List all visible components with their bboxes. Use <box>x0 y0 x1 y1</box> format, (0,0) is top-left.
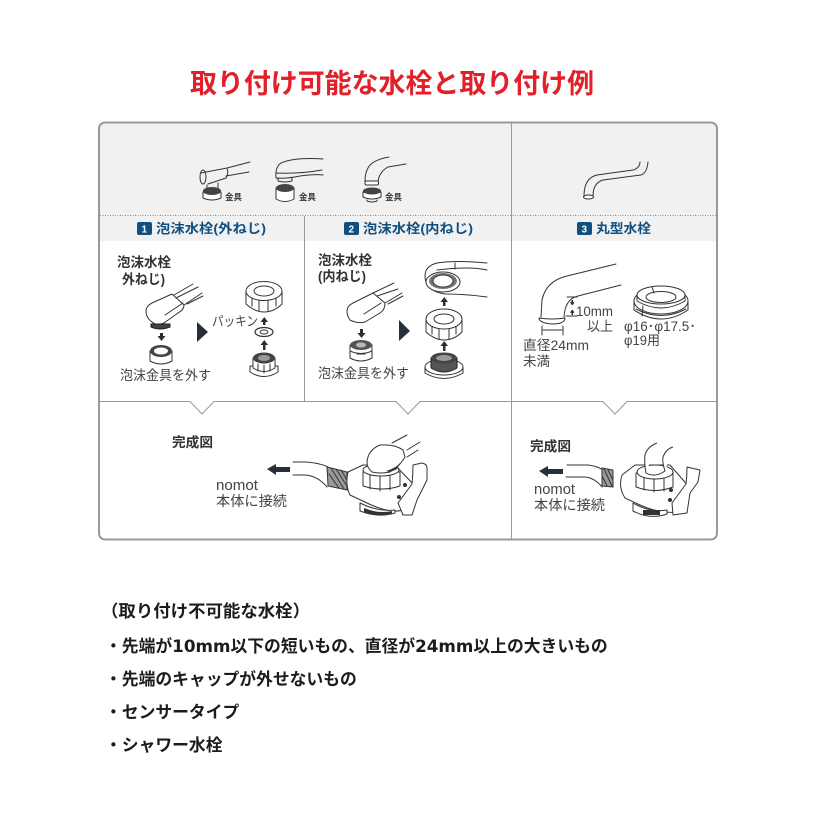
panel: step 1 external thread <box>117 254 282 383</box>
icon: faucet type 3: 金具 <box>385 192 402 202</box>
icon: arrow up <box>440 341 448 351</box>
icon: arrow up <box>260 317 268 325</box>
label: external thread: 外ねじ) <box>122 271 165 287</box>
arrow: next <box>197 322 208 342</box>
arrow: next <box>399 320 410 341</box>
label: under: 未満 <box>523 354 550 369</box>
label: connect to body: 本体に接続 <box>534 497 605 514</box>
arrow: to nomot <box>267 464 290 475</box>
label: external thread faucet: 泡沫水栓 <box>117 254 171 270</box>
icon: threaded adapter <box>425 352 463 378</box>
label: sizes line 2: φ19用 <box>624 333 660 348</box>
label: 10mm or more: 10mm <box>576 304 613 319</box>
icon: faucet type 2: 金具 <box>299 192 316 202</box>
caption: remove aerator: 泡沫金具を外す <box>318 366 409 381</box>
heading: not installable: （取り付け不可能な水栓） <box>101 601 310 621</box>
heading: type 3: 丸型水栓 <box>596 221 651 236</box>
panel: faucet types <box>99 122 717 540</box>
icon: faucet type 1 <box>200 162 250 202</box>
label: diameter: 直径24mm <box>523 338 589 353</box>
label: or more: 以上 <box>587 319 613 334</box>
list item: short or large: ・先端が10mm以下の短いもの、直径が24mm以上の大きいもの <box>105 636 608 656</box>
label: completed: 完成図 <box>530 438 571 454</box>
icon: arrow up <box>260 340 268 350</box>
panel: step 2 internal thread <box>318 252 487 381</box>
list item: sensor: ・センサータイプ <box>105 703 239 722</box>
label: completed: 完成図 <box>172 434 213 450</box>
heading: type 2: 2 <box>348 224 354 236</box>
icon: ring adapter <box>634 286 688 319</box>
label: sizes: φ16･φ17.5･ <box>624 319 696 334</box>
icon: faucet with dimensions <box>539 264 621 335</box>
icon: threaded base <box>250 352 278 376</box>
icon: faucet type 4 <box>584 162 648 199</box>
list item: cap fixed: ・先端のキャップが外せないもの <box>105 669 357 689</box>
label: nomot: nomot <box>534 482 575 498</box>
panel: step 3 round faucet <box>523 264 696 369</box>
icon: nut <box>246 282 282 312</box>
label: connect to body: 本体に接続 <box>216 493 287 510</box>
heading: type 1: 泡沫水栓(外ねじ) <box>156 221 266 236</box>
icon: faucet type 2 <box>276 158 323 202</box>
icon: connector assembled <box>566 443 700 516</box>
label: nomot: nomot <box>216 478 258 494</box>
icon: faucet type 1: 金具 <box>225 192 242 202</box>
heading: type 2: 泡沫水栓(内ねじ) <box>363 221 473 236</box>
label: packing: パッキン <box>212 314 258 329</box>
icon: faucet <box>347 283 403 361</box>
label: internal thread: (内ねじ) <box>318 268 366 284</box>
caption: remove aerator: 泡沫金具を外す <box>120 368 211 383</box>
heading: type 3: 3 <box>582 224 588 236</box>
title: 取り付け可能な水栓と取り付け例 <box>190 69 594 99</box>
icon: faucet end <box>425 262 487 297</box>
heading: type 1: 1 <box>142 224 148 236</box>
arrow: to nomot <box>539 466 563 477</box>
icon: faucet type 3 <box>363 157 406 202</box>
list item: shower: ・シャワー水栓 <box>105 735 223 755</box>
panel: completed figure left <box>172 434 427 515</box>
icon: connector assembled <box>293 435 427 515</box>
panel: completed figure right <box>530 438 700 516</box>
label: internal thread faucet: 泡沫水栓 <box>318 252 372 268</box>
icon: arrow up <box>440 297 448 306</box>
icon: nut <box>426 309 462 340</box>
icon: faucet removing aerator <box>146 284 203 364</box>
icon: washer <box>255 328 273 336</box>
